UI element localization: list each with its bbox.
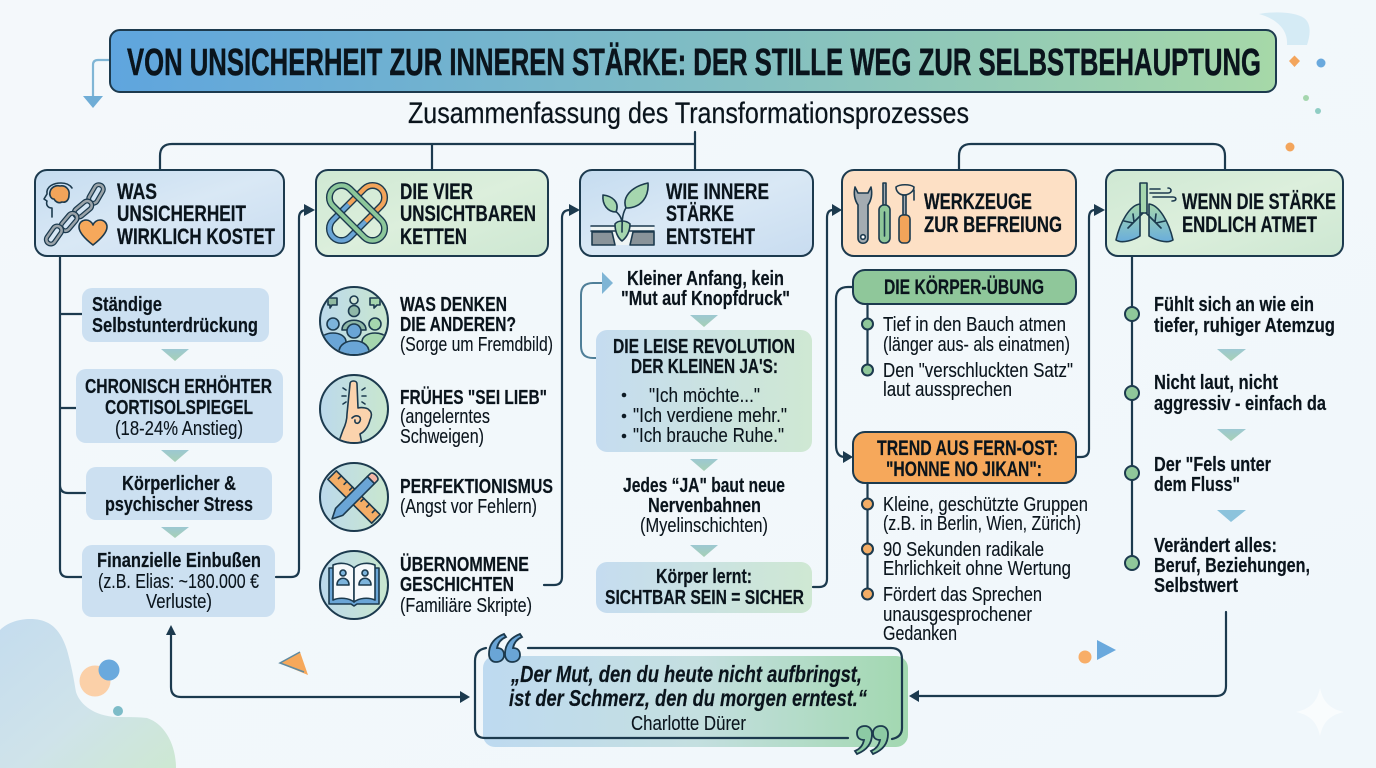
header text: WERKZEUGE xyxy=(924,189,1032,214)
header text xyxy=(400,179,536,249)
arrow: down xyxy=(690,545,718,557)
step: einfach da: aggressiv - einfach da xyxy=(1154,392,1326,415)
item: was denken die anderen xyxy=(320,287,553,358)
icon: lungs and breath xyxy=(1116,183,1176,242)
item: frühes sei lieb xyxy=(320,375,547,448)
card: leise Revolution: "Ich brauche Ruhe." xyxy=(633,425,784,447)
item text xyxy=(400,553,532,617)
item text: GESCHICHTEN xyxy=(400,573,514,596)
arrow: column three to column four xyxy=(813,204,842,587)
card: leise Revolution: DER KLEINEN JA'S: xyxy=(631,355,778,378)
quote text: „Der Mut, den du heute nicht aufbringst, xyxy=(510,661,862,687)
header text xyxy=(924,189,1062,237)
item text: (Sorge um Fremdbild) xyxy=(400,334,553,356)
item text: Schweigen) xyxy=(400,426,484,448)
header text: WIE INNERE xyxy=(666,179,769,204)
timeline: Körper-Übung xyxy=(862,304,1073,401)
arrow: down xyxy=(161,450,189,462)
step: ruhiger Atemzug xyxy=(1125,293,1335,337)
quote text: ist der Schmerz, den du morgen erntest.“ xyxy=(509,685,867,711)
text: neue Nervenbahnen xyxy=(623,474,785,537)
text: kleiner Anfang: Kleiner Anfang, kein xyxy=(627,267,784,290)
card: Körper lernt xyxy=(596,562,812,613)
step: ruhiger Atemzug: Fühlt sich an wie ein xyxy=(1154,293,1314,316)
title banner xyxy=(110,30,1276,92)
item text: FRÜHES "SEI LIEB" xyxy=(400,386,547,409)
card: Körper lernt: Körper lernt: xyxy=(656,565,752,588)
panel: was Unsicherheit wirklich kostet xyxy=(35,170,284,617)
timeline: Honne no Jikan: 90 Sekunden radikale xyxy=(883,539,1044,561)
step: finanzielle Einbußen xyxy=(82,545,275,617)
arrow: column four to column five xyxy=(1077,204,1105,457)
panel: Werkzeuge zur Befreiung xyxy=(836,170,1088,645)
decoration: white star xyxy=(1296,688,1344,736)
card: Trend aus Fern-Ost xyxy=(853,432,1076,483)
card: leise Revolution xyxy=(596,330,812,452)
step: einfach da: Nicht laut, nicht xyxy=(1154,371,1278,394)
timeline: Körper-Übung: laut aussprechen xyxy=(883,379,1012,401)
arrow: column one to column two xyxy=(276,204,315,577)
card: Trend aus Fern-Ost: "HONNE NO JIKAN": xyxy=(886,458,1042,481)
item: Perfektionismus xyxy=(320,463,553,531)
step: Cortisolspiegel: CORTISOLSPIEGEL xyxy=(105,396,253,419)
arrow: down xyxy=(161,527,189,538)
header text: UNSICHTBAREN xyxy=(400,201,536,226)
header text: STÄRKE xyxy=(666,201,734,226)
card: leise Revolution: "Ich möchte..." xyxy=(649,385,760,407)
quote text xyxy=(509,661,867,735)
timeline: Honne no Jikan: Fördert das Sprechen xyxy=(883,584,1042,606)
step: Fels unter dem Fluss: dem Fluss" xyxy=(1154,473,1240,496)
arrow: title to lower left xyxy=(83,60,110,108)
header text xyxy=(117,179,275,249)
arrow: column two to column three xyxy=(544,204,580,585)
arrow: down xyxy=(1217,510,1246,522)
step: finanzielle Einbußen: Verluste) xyxy=(146,591,212,613)
header card four xyxy=(842,170,1076,256)
item text: DIE ANDEREN? xyxy=(400,313,516,336)
quote text: Charlotte Dürer xyxy=(631,713,746,735)
panel: wie innere Stärke entsteht xyxy=(580,170,813,613)
header text: ENTSTEHT xyxy=(666,224,755,249)
decoration: dot and blue triangle xyxy=(1078,640,1116,664)
header text: UNSICHERHEIT xyxy=(117,201,246,226)
step: Selbstunterdrückung xyxy=(82,288,269,342)
connector: top bracket over last two columns xyxy=(959,144,1225,170)
timeline: Honne no Jikan: Ehrlichkeit ohne Wertung xyxy=(883,558,1071,580)
timeline: Körper-Übung: Den "verschluckten Satz" xyxy=(883,360,1073,382)
item text xyxy=(400,386,547,448)
step: Fels unter dem Fluss: Der "Fels unter xyxy=(1154,453,1271,476)
card: die Körper-Übung xyxy=(853,270,1076,304)
decoration: bottom-left blob xyxy=(0,619,176,768)
step: verändert alles: Beruf, Beziehungen, xyxy=(1154,554,1310,577)
card: leise Revolution: "Ich verdiene mehr." xyxy=(633,405,787,427)
arrow: down xyxy=(1217,349,1246,361)
item text: WAS DENKEN xyxy=(400,293,507,316)
header text xyxy=(1182,189,1336,237)
card: Körper lernt: SICHTBAR SEIN = SICHER xyxy=(605,586,804,609)
step: Stress: psychischer Stress xyxy=(105,493,253,516)
arrow: feedback loop xyxy=(581,272,613,358)
connector: column one spine xyxy=(60,256,85,577)
step: einfach da xyxy=(1125,371,1326,415)
arrow: column five to quote xyxy=(909,612,1226,702)
text: kleiner Anfang: "Mut auf Knopfdruck" xyxy=(621,287,790,310)
subtitle: Zusammenfassung des Transformationsprozesses xyxy=(408,97,969,130)
header text: WIRKLICH KOSTET xyxy=(117,224,275,249)
icon: ruler and pencil xyxy=(320,463,388,531)
header text xyxy=(666,179,769,249)
step: Selbstunterdrückung: Ständige xyxy=(92,293,162,316)
step: finanzielle Einbußen: Finanzielle Einbußen xyxy=(97,549,261,572)
step: verändert alles: Selbstwert xyxy=(1154,574,1238,597)
step: verändert alles: Verändert alles: xyxy=(1154,534,1277,557)
step: Cortisolspiegel xyxy=(76,369,283,443)
arrow: down xyxy=(1217,429,1246,441)
step: Fels unter dem Fluss xyxy=(1125,453,1271,496)
header text: DIE VIER xyxy=(400,179,473,204)
icon: crowd with speech bubbles xyxy=(320,287,388,358)
timeline spine xyxy=(1131,256,1133,563)
icon: head, chain and heart xyxy=(44,183,107,246)
step: Cortisolspiegel: (18-24% Anstieg) xyxy=(115,418,243,440)
item text: PERFEKTIONISMUS xyxy=(400,475,553,498)
text: neue Nervenbahnen: Jedes “JA" baut neue xyxy=(623,474,785,497)
timeline: Honne no Jikan: Gedanken xyxy=(883,623,957,645)
arrow: down xyxy=(690,315,718,327)
header card five xyxy=(1106,170,1343,256)
text: kleiner Anfang xyxy=(621,267,790,310)
decoration: top-right shapes xyxy=(1259,12,1326,151)
arrow: down xyxy=(161,349,189,361)
panel: quote xyxy=(475,634,908,754)
arrow: down xyxy=(690,459,718,471)
item text xyxy=(400,475,553,518)
icon: opening quotation mark xyxy=(489,634,522,662)
item: übernommene Geschichten xyxy=(320,551,532,619)
text: neue Nervenbahnen: (Myelinschichten) xyxy=(640,515,768,537)
step: Stress xyxy=(86,467,272,520)
item text: ÜBERNOMMENE xyxy=(400,553,529,576)
panel: wenn die Stärke endlich atmet xyxy=(1106,170,1343,597)
timeline: Honne no Jikan: unausgesprochener xyxy=(883,604,1032,626)
card: Trend aus Fern-Ost: TREND AUS FERN-OST: xyxy=(877,437,1058,460)
item text xyxy=(400,293,553,356)
quote frame xyxy=(475,648,902,739)
item text: (angelerntes xyxy=(400,406,490,428)
icon: open book with portraits xyxy=(320,551,388,619)
timeline: Honne no Jikan xyxy=(862,483,1088,645)
step: Selbstunterdrückung: Selbstunterdrückung xyxy=(92,314,258,337)
step: Stress: Körperlicher & xyxy=(122,472,236,495)
item text: (Familiäre Skripte) xyxy=(400,595,532,617)
header text: ZUR BEFREIUNG xyxy=(924,212,1062,237)
icon: interlocked chains xyxy=(324,180,390,246)
step: ruhiger Atemzug: tiefer, ruhiger Atemzug xyxy=(1154,314,1335,337)
arrow: quote loop back to finanzielle Einbußen xyxy=(166,625,470,703)
icon: sprout in cracked ground xyxy=(591,183,654,245)
step: Cortisolspiegel: CHRONISCH ERHÖHTER xyxy=(85,375,272,398)
text: neue Nervenbahnen: Nervenbahnen xyxy=(648,494,761,517)
timeline: Honne no Jikan: Kleine, geschützte Gruppen xyxy=(883,494,1088,516)
icon: wrench, screwdriver, hammer xyxy=(854,183,914,243)
card: die Körper-Übung: DIE KÖRPER-ÜBUNG xyxy=(884,276,1044,299)
header card three xyxy=(580,170,813,256)
header text: KETTEN xyxy=(400,224,467,249)
header card two xyxy=(316,170,548,256)
panel: die vier unsichtbaren Ketten xyxy=(316,170,553,619)
step: finanzielle Einbußen: (z.B. Elias: ~180.000 € xyxy=(98,571,259,593)
icon: closing quotation mark xyxy=(855,726,888,754)
card: leise Revolution: DIE LEISE REVOLUTION xyxy=(613,335,795,358)
step: verändert alles xyxy=(1125,534,1310,597)
header text: ENDLICH ATMET xyxy=(1182,212,1317,237)
connector: Körper-Übung to Trend xyxy=(836,287,853,463)
header text: WAS xyxy=(117,179,157,204)
item text: (Angst vor Fehlern) xyxy=(400,496,537,518)
timeline: Honne no Jikan: (z.B. in Berlin, Wien, Zürich) xyxy=(883,513,1081,535)
timeline: Körper-Übung: (länger aus- als einatmen) xyxy=(883,334,1070,356)
header card one xyxy=(35,170,284,256)
icon: raised finger xyxy=(320,375,388,444)
timeline: Körper-Übung: Tief in den Bauch atmen xyxy=(883,314,1066,336)
decoration: orange triangle xyxy=(279,652,308,675)
connector: top bracket over first three columns xyxy=(160,132,695,170)
